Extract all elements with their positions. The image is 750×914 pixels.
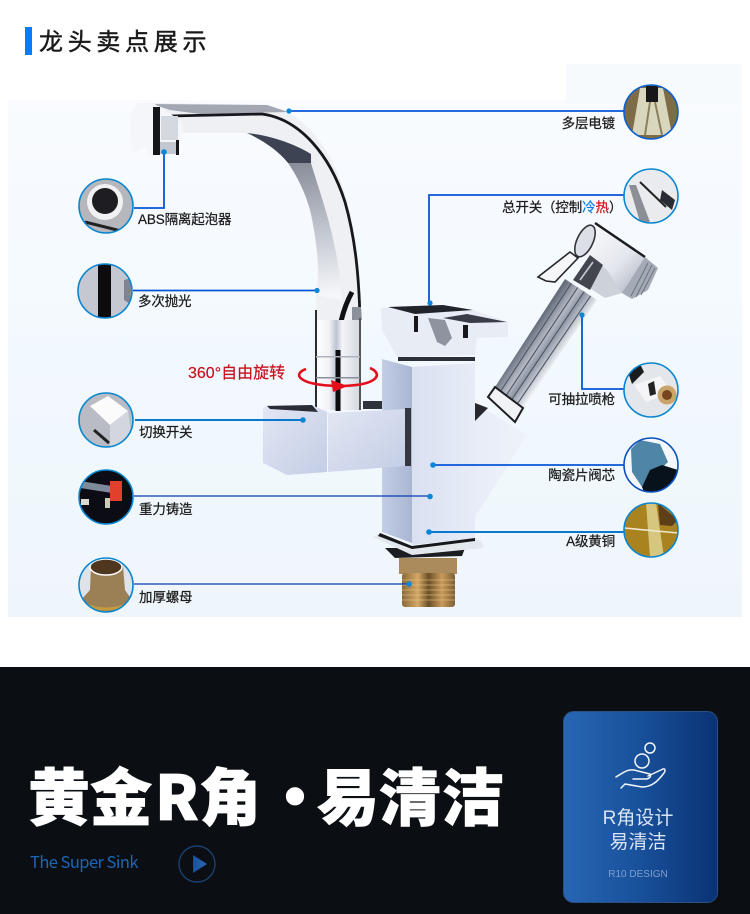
rotation indicator: 360°自由旋转 (188, 364, 285, 382)
callout: ABS aerator: ABS隔离起泡器 (138, 211, 232, 227)
callout: main switch hot and cold control: 总开关（控制冷热） (502, 200, 622, 215)
promo headline: · (264, 748, 326, 838)
callout: thick nut: 加厚螺母 (139, 590, 192, 605)
promo headline: 清 (379, 748, 441, 838)
swivel column (315, 310, 361, 411)
panel: dark promo banner (0, 667, 750, 914)
callout: multilayer plating (286, 85, 678, 139)
rotation indicator (188, 364, 377, 392)
promo headline: 黄 (28, 748, 90, 838)
card text: 易清洁 (609, 831, 667, 853)
section heading: 龙头卖点展示 (39, 29, 211, 56)
callout: ceramic valve core (430, 438, 678, 492)
callout: gravity casting: 重力铸造 (139, 502, 193, 517)
callout: diverter switch (79, 393, 306, 447)
spout head (130, 103, 183, 155)
callout: ABS aerator (79, 149, 232, 233)
promo headline: 易 (317, 748, 379, 838)
panel: product diagram background (8, 64, 742, 617)
card text (603, 807, 673, 880)
base plate (373, 533, 483, 558)
callout: grade A brass: A级黄铜 (566, 534, 615, 549)
callout: diverter switch: 切换开关 (139, 425, 192, 440)
callout: ceramic valve core: 陶瓷片阀芯 (548, 468, 615, 483)
promo headline: 金 (90, 748, 152, 838)
icon: play button (179, 846, 215, 882)
promo headline: 洁 (442, 748, 504, 838)
main body (382, 359, 527, 545)
spout arc (150, 103, 361, 350)
callout: main switch hot and cold control (427, 169, 678, 306)
callout: pull-out spray gun (548, 312, 678, 417)
horizontal switch box (263, 401, 411, 475)
pull-out spray handle (488, 279, 597, 422)
top control lever (381, 305, 508, 361)
callout: grade A brass (426, 503, 678, 557)
faucet illustration (130, 103, 658, 607)
callout: multiple polishing: 多次抛光 (138, 293, 191, 309)
callout: pull-out spray gun: 可抽拉喷枪 (548, 391, 616, 407)
brass nut and thread (399, 558, 457, 607)
card text: R角设计 (603, 807, 673, 829)
spray head (538, 222, 658, 299)
card: R corner design (564, 712, 718, 902)
card text: R10 DESIGN (608, 869, 668, 880)
promo headline: 角 (199, 748, 261, 838)
callout: gravity casting (79, 470, 433, 524)
callout: thick nut (79, 558, 412, 612)
promo headline: R (155, 748, 199, 838)
icon: hand with bubbles (616, 743, 665, 788)
promo subtitle: The Super Sink (30, 849, 138, 873)
callout: multilayer plating: 多层电镀 (562, 115, 616, 131)
callout: multiple polishing (78, 264, 320, 318)
